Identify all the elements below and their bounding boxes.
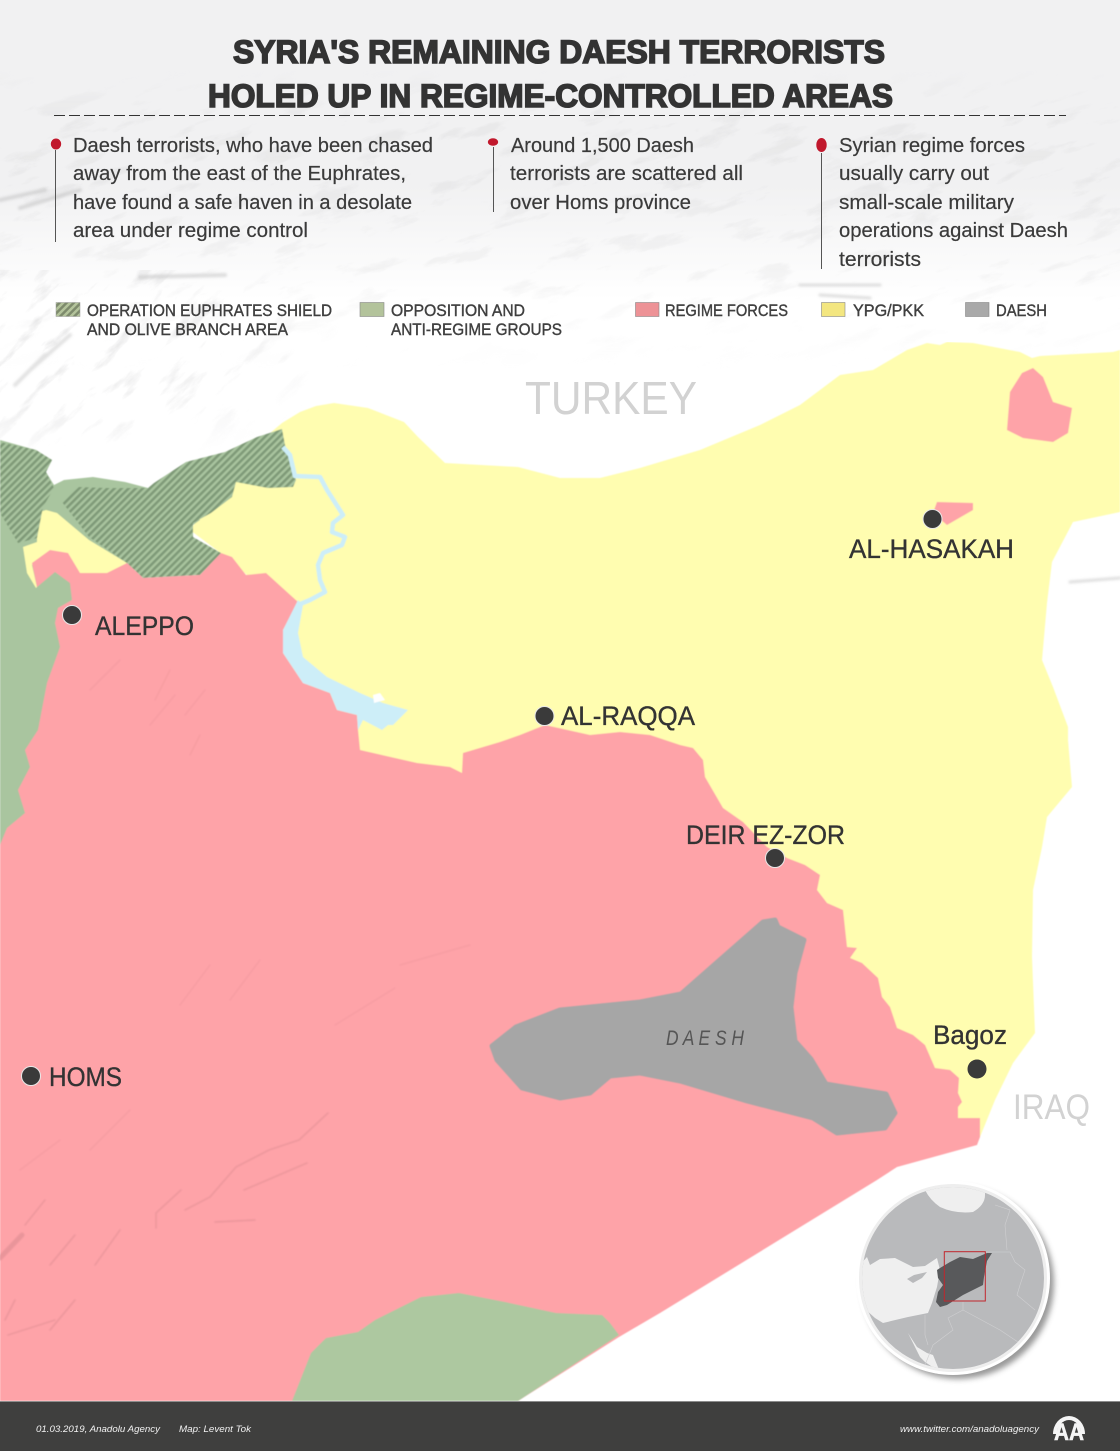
label: Iraq: IRAQ — [1013, 1088, 1090, 1127]
city: Al-Raqqa: AL-RAQQA — [561, 701, 695, 731]
footer — [0, 1401, 1120, 1451]
legend: YPG/PKK — [822, 302, 924, 320]
city: Bagoz — [933, 1020, 1007, 1078]
legend: YPG/PKK: YPG/PKK — [853, 302, 924, 320]
region: opposition west — [0, 440, 200, 860]
text block: regime operations: small-scale military — [839, 191, 1015, 214]
text block: 1,500 terrorists: over Homs province — [510, 191, 691, 214]
footer: Map: Levent Tok — [179, 1424, 252, 1435]
region: YPG/PKK north of Aleppo — [23, 510, 127, 588]
terrain on regime area — [0, 660, 470, 1335]
icon: AA logo: AA — [1054, 1419, 1084, 1446]
city: Homs: HOMS — [49, 1062, 122, 1092]
country borders — [925, 1205, 1035, 1365]
title — [208, 34, 893, 114]
city: Deir ez-Zor: DEIR EZ-ZOR — [686, 820, 845, 850]
text block: chased away: have found a safe haven in a desolate — [73, 191, 412, 214]
text block: regime operations: Syrian regime forces — [839, 134, 1025, 157]
text block: regime operations: usually carry out — [839, 162, 989, 185]
footer: 01.03.2019, Anadolu Agency — [36, 1424, 161, 1435]
map — [0, 342, 1120, 1401]
text block: chased away: away from the east of the Euphrates, — [73, 162, 406, 185]
text block: regime operations — [816, 134, 1068, 271]
terrain texture — [0, 118, 1120, 584]
river Euphrates — [283, 447, 408, 730]
legend: Daesh — [966, 302, 1047, 320]
legend: Euphrates Shield: OPERATION EUPHRATES SHIELD — [87, 302, 332, 320]
city: Al-Hasakah: AL-HASAKAH — [849, 534, 1014, 564]
Syria — [936, 1253, 992, 1307]
text block: 1,500 terrorists: Around 1,500 Daesh — [511, 134, 694, 157]
legend: opposition — [360, 302, 562, 339]
text block: chased away: area under regime control — [73, 219, 308, 242]
legend: opposition: ANTI-REGIME GROUPS — [391, 321, 562, 339]
city: Deir ez-Zor — [686, 820, 845, 868]
city: Aleppo: ALEPPO — [95, 611, 194, 641]
text block: chased away: Daesh terrorists, who have been chased — [73, 134, 433, 157]
label: Turkey: TURKEY — [525, 372, 697, 424]
header background — [0, 0, 1120, 300]
legend: Euphrates Shield — [56, 302, 332, 339]
legend: Euphrates Shield: AND OLIVE BRANCH AREA — [87, 321, 288, 339]
region: Euphrates Shield east — [62, 429, 296, 578]
region: Euphrates Shield west — [0, 442, 54, 543]
city: Aleppo — [62, 606, 194, 641]
text block: regime operations: terrorists — [839, 248, 921, 271]
footer: www.twitter.com/anadoluagency — [900, 1424, 1040, 1435]
city: Bagoz: Bagoz — [933, 1020, 1007, 1050]
inset locator globe — [855, 1170, 1054, 1379]
region: YPG/PKK — [190, 342, 1120, 1137]
region: opposition south — [292, 1293, 619, 1401]
region: Daesh — [492, 920, 895, 1133]
seas — [862, 1187, 985, 1368]
region: regime forces — [0, 550, 980, 1401]
label: Daesh area: D A E S H — [666, 1027, 745, 1050]
region: regime pocket Al-Hasakah — [933, 502, 973, 525]
title: SYRIA'S REMAINING DAESH TERRORISTS — [233, 34, 885, 70]
title: HOLED UP IN REGIME-CONTROLLED AREAS — [208, 78, 893, 114]
legend: regime forces: REGIME FORCES — [665, 302, 788, 320]
text block: 1,500 terrorists — [488, 134, 743, 214]
text block: regime operations: operations against Daesh — [839, 219, 1068, 242]
region: regime pocket north-east — [1007, 368, 1072, 442]
legend: opposition: OPPOSITION AND — [391, 302, 525, 320]
text block: chased away — [51, 134, 433, 242]
text block: 1,500 terrorists: terrorists are scattered all — [510, 162, 743, 185]
city: Homs — [22, 1062, 122, 1092]
legend — [56, 302, 1047, 339]
legend: Daesh: DAESH — [996, 302, 1047, 320]
city: Al-Hasakah — [849, 510, 1014, 564]
